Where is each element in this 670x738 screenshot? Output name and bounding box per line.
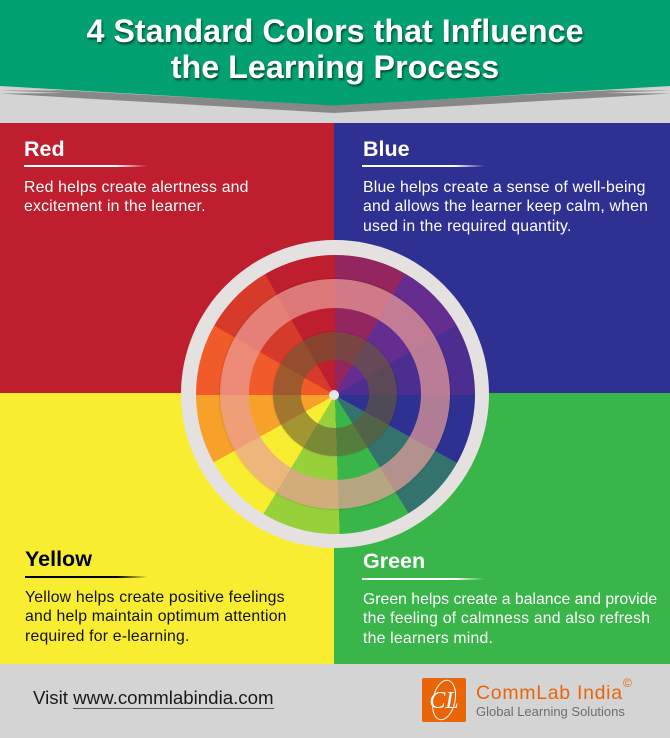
title: the Learning Process [171,49,499,85]
header banner [0,0,670,113]
text: yellow: required for e-learning. [25,628,190,645]
text: green: the feeling of calmness and also refresh [363,610,650,627]
logo icon: CL [429,688,459,714]
wheel dark band [273,332,397,456]
wheel center dot [329,390,339,400]
logo tagline: Global Learning Solutions [476,704,625,719]
text: red: Red helps create alertness and [24,179,249,196]
text: green [363,591,657,647]
logo icon [422,678,466,722]
text: red [24,179,249,215]
panel: red [0,123,334,393]
footer link: Visit www.commlabindia.com [33,687,274,708]
title [86,13,585,88]
text: yellow: and help maintain optimum attention [25,608,287,625]
underline: blue [362,165,485,167]
color wheel [181,240,489,548]
panel: blue [334,123,670,393]
text: red: excitement in the learner. [24,198,206,215]
heading: yellow: Yellow [25,547,92,571]
wheel outer ring [181,240,489,548]
heading: blue: Blue [363,137,410,161]
panel: yellow [0,393,334,664]
text: blue: Blue helps create a sense of well-being [363,179,646,196]
underline: red [24,165,147,167]
text: blue: and allows the learner keep calm, when [363,198,648,215]
logo copyright: © [623,676,632,690]
underline: yellow [25,576,148,578]
underline: green [362,578,485,580]
text: green: the learners mind. [363,630,493,647]
title: 4 Standard Colors that Influence [86,13,584,49]
logo [422,676,632,722]
wheel color segments [196,254,474,534]
text: yellow [25,589,287,645]
panel: green [334,393,670,664]
logo name: CommLab India [476,682,623,704]
text: yellow: Yellow helps create positive feelings [25,589,285,606]
text: blue: used in the required quantity. [363,218,572,235]
wheel pale band [220,279,450,509]
heading: green: Green [363,549,425,573]
heading: red: Red [24,137,65,161]
text: green: Green helps create a balance and provide [363,591,657,608]
text: blue [363,179,648,235]
